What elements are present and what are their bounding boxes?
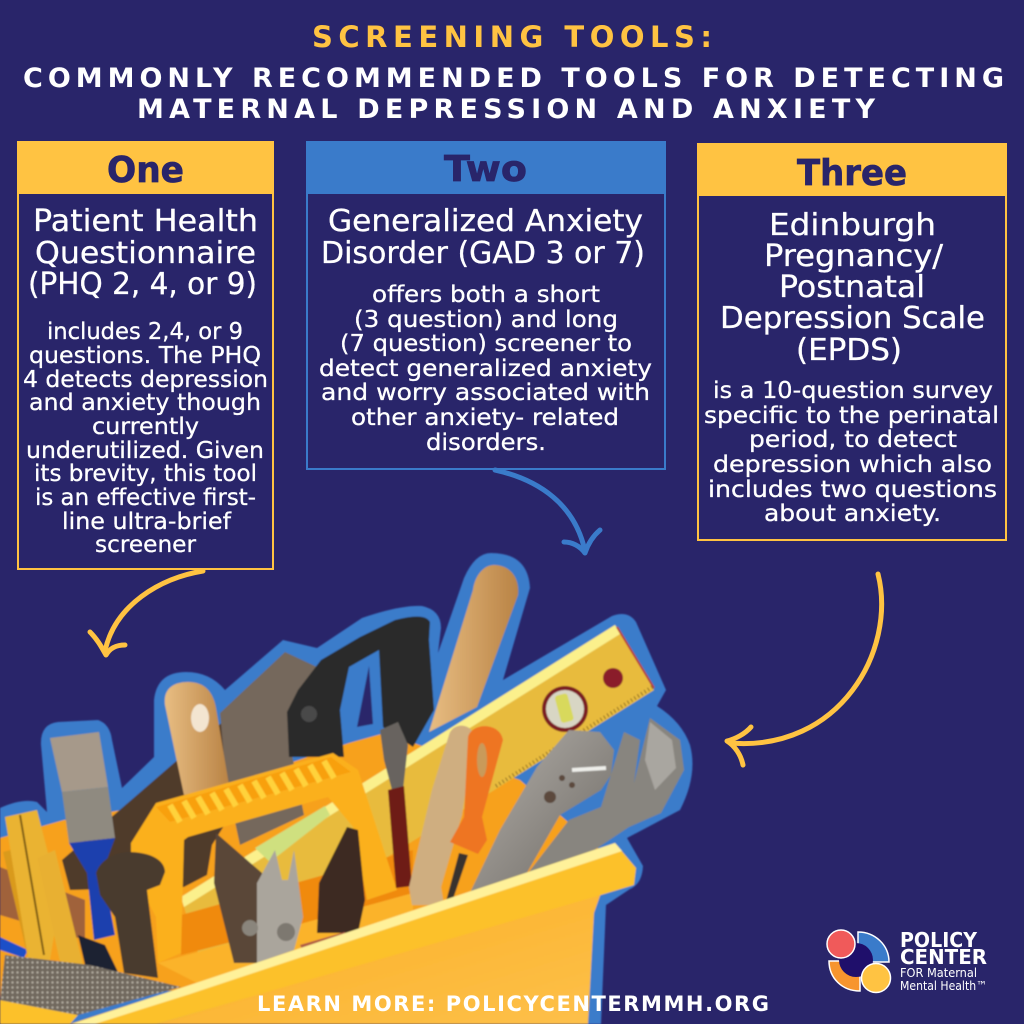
dark blade [62, 720, 240, 890]
panel one description: its brevity, this tool [34, 459, 257, 487]
toolbox blue outline [0, 553, 692, 1024]
logo wordmark: CENTER [900, 945, 987, 969]
panel one description: includes 2,4, or 9 [47, 317, 243, 345]
panel two description: detect generalized anxiety [319, 354, 652, 382]
panel three description: is a 10-question survey [713, 376, 993, 404]
panel one description: screener [95, 530, 196, 558]
hacksaw bolt [301, 706, 317, 722]
slip pliers [242, 850, 303, 963]
panel two frame [307, 142, 665, 469]
bin front [0, 843, 636, 1024]
pipe wrench [468, 730, 614, 898]
blue handle [69, 838, 115, 940]
grey blade [220, 652, 317, 845]
panel: one [17, 141, 274, 569]
toolbox illustration [0, 553, 692, 1024]
bin rim [70, 843, 636, 1024]
pincers [96, 852, 165, 978]
dark tape roll [78, 935, 118, 972]
level window [542, 686, 588, 732]
ferrule [62, 787, 115, 843]
wooden saw handle [165, 682, 229, 795]
panel three description: includes two questions [708, 475, 997, 503]
panel three tool name: Depression Scale [720, 301, 985, 336]
logo wordmark: Mental Health™ [900, 978, 987, 993]
panel one frame [18, 142, 273, 569]
panel one description: currently [92, 412, 199, 440]
logo wordmark: POLICY [900, 928, 977, 952]
panel three description: period, to detect [749, 425, 957, 453]
footer call to action: LEARN MORE: POLICYCENTERMMH.ORG [257, 992, 769, 1016]
pipe wrench bolts [544, 791, 556, 803]
logo orange arc [829, 961, 860, 991]
panel one description: underutilized. Given [26, 436, 264, 464]
panel one description: 4 detects depression [23, 365, 268, 393]
dark pliers [317, 827, 365, 933]
panel one description: questions. The PHQ [29, 341, 261, 369]
panel one description [23, 317, 268, 558]
wood piece [0, 867, 85, 940]
panel two tool name [321, 204, 645, 271]
subheading line 1: COMMONLY RECOMMENDED TOOLS FOR DETECTING [23, 63, 1004, 94]
folding ruler [3, 810, 83, 965]
panel three tool name: (EPDS) [796, 333, 902, 368]
logo centre [839, 943, 873, 977]
adjustable wrench [528, 718, 684, 873]
logo wordmark: FOR Maternal [900, 965, 977, 980]
panel two description: and worry associated with [321, 378, 650, 406]
panel two description: (3 question) and long [354, 305, 618, 333]
black hacksaw frame [287, 616, 434, 757]
panel three header [697, 143, 1007, 196]
panel one header [17, 141, 274, 194]
shears [214, 833, 262, 963]
panel: three [697, 143, 1007, 540]
panel one description: is an effective first- [35, 483, 256, 511]
panel one description: line ultra-brief [62, 507, 232, 535]
glass cutter [380, 722, 412, 888]
panel two tool name: Generalized Anxiety [328, 204, 643, 239]
wooden screwdriver [409, 726, 474, 905]
arrow: two to toolbox [495, 470, 600, 553]
logo wordmark [900, 928, 987, 993]
title block [23, 20, 1004, 125]
bin interior [0, 733, 600, 1000]
panel two header [306, 141, 666, 194]
level ruler marks [496, 686, 654, 786]
panel three frame [698, 144, 1006, 540]
panel three description: depression which also [713, 450, 992, 478]
panel three description [704, 376, 999, 527]
bin handle ribs [156, 757, 351, 822]
panel one description: and anxiety though [29, 388, 261, 416]
panel: two [306, 141, 666, 469]
level body [181, 625, 654, 960]
panel two description: offers both a short [372, 280, 600, 308]
panel two tool name: Disorder (GAD 3 or 7) [321, 236, 645, 271]
level red dot [603, 668, 623, 688]
level top edge [181, 625, 620, 907]
panel two number: Two [444, 149, 527, 190]
bin left corner [0, 1000, 78, 1024]
subheading line 2: MATERNAL DEPRESSION AND ANXIETY [137, 94, 875, 125]
panel three description: specific to the perinatal [704, 401, 999, 429]
bin rim highlight [72, 843, 622, 1024]
blue tape [0, 937, 28, 958]
saw handle hole [191, 704, 209, 732]
panel two description: (7 question) screener to [340, 329, 632, 357]
hand saw blade [62, 652, 317, 890]
panel two description: other anxiety- related [351, 403, 619, 431]
red handle [300, 932, 345, 955]
logo yellow circle [862, 964, 890, 992]
level bubble [255, 806, 330, 862]
saw frame window [357, 666, 373, 727]
green grip [520, 870, 545, 892]
panel one tool name: (PHQ 2, 4, or 9) [28, 267, 257, 302]
panel three tool name [720, 208, 985, 368]
panel three description: about anxiety. [764, 499, 941, 527]
bin handle [131, 753, 397, 963]
panel three number: Three [797, 153, 907, 194]
spirit level [181, 625, 654, 960]
panel two description: disorders. [426, 428, 546, 456]
adjustable wrench bright jaw [645, 722, 676, 790]
orange screwdriver [445, 726, 503, 908]
logo: policy center [827, 928, 987, 993]
panel one number: One [107, 150, 184, 191]
sandpaper [0, 955, 181, 1015]
pliers rivets [277, 923, 295, 941]
panel two description [319, 280, 652, 456]
panel one tool name: Questionnaire [35, 236, 256, 271]
heading: screening tools: SCREENING TOOLS: [312, 20, 712, 54]
arrow: three to toolbox [727, 574, 882, 765]
panel three tool name: Edinburgh [769, 208, 936, 243]
arrow: one to toolbox [90, 571, 203, 655]
logo blue arc [858, 932, 889, 962]
panel one tool name [28, 204, 258, 302]
paint brush [50, 732, 115, 940]
panel three tool name: Pregnancy/ [764, 239, 944, 274]
panel one tool name: Patient Health [33, 204, 258, 239]
wooden chisel handle [429, 565, 518, 732]
inner tray [181, 850, 413, 955]
level red edge [617, 627, 654, 688]
logo red circle [827, 930, 855, 958]
bin body [157, 893, 601, 1024]
bristles [50, 732, 108, 792]
panel three tool name: Postnatal [779, 270, 925, 305]
logo mark [827, 930, 890, 992]
